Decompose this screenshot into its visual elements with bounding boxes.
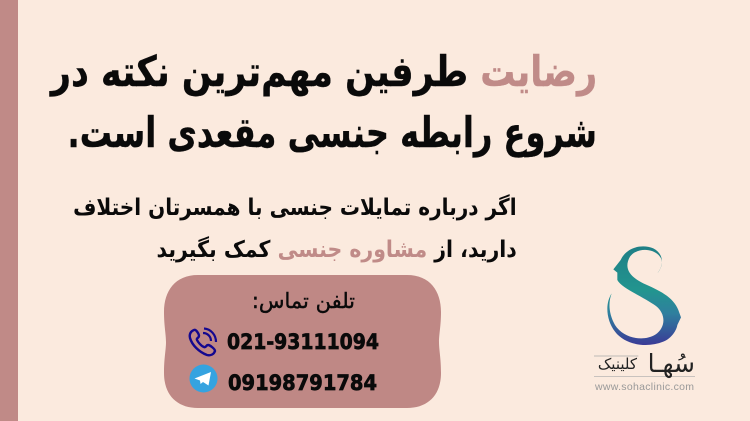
logo name: سُهـا: [648, 349, 695, 378]
logo subtitle: کلینیک: [598, 355, 637, 373]
panel: contact: [164, 275, 441, 408]
body text: [74, 194, 517, 263]
logo: Soha Clinic: [594, 246, 695, 393]
logo url: www.sohaclinic.com: [595, 381, 694, 393]
left accent band: [0, 0, 18, 421]
contact label: تلفن تماس:: [252, 289, 355, 313]
mobile number: 09198791784: [228, 371, 377, 395]
heading: [49, 47, 597, 158]
body line 1: اگر درباره تمایلات جنسی با همسرتان اختلاف: [74, 195, 517, 221]
logo mark: [607, 246, 681, 345]
icon: telegram: [190, 364, 218, 392]
heading line 1: رضایت طرفین مهم‌ترین نکته در: [51, 47, 597, 96]
body line 2: دارید، از مشاوره جنسی کمک بگیرید: [157, 237, 517, 263]
icon: phone: [188, 327, 218, 356]
heading line 2: شروع رابطه جنسی مقعدی است.: [68, 108, 597, 157]
